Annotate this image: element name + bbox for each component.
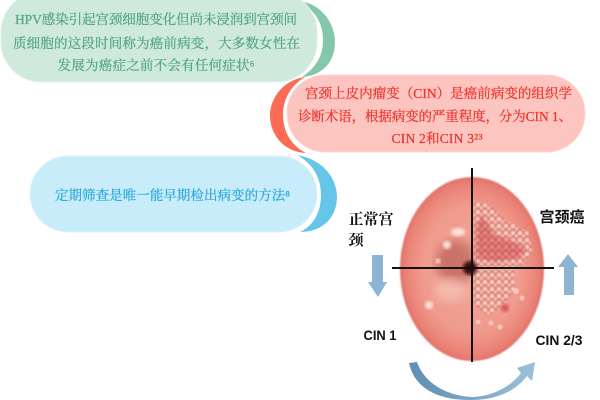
red text: CIN 2和CIN 3²³ xyxy=(392,131,482,146)
cervix illustration xyxy=(400,177,544,361)
chart: cervix diagram xyxy=(348,168,585,400)
green text: 质细胞的这段时间称为癌前病变，大多数女性在 xyxy=(13,35,300,52)
blue crescent xyxy=(297,155,337,232)
panel: blue screening note xyxy=(30,155,337,232)
blue text: 定期筛查是唯一能早期检出病变的方法⁸ xyxy=(55,187,290,203)
green text xyxy=(13,11,300,73)
green pill xyxy=(1,0,317,82)
arrow: curved progression xyxy=(409,362,535,400)
label: normal cervix xyxy=(348,210,394,249)
green text: HPV感染引起宫颈细胞变化但尚未浸润到宫颈间 xyxy=(15,11,297,27)
blue pill xyxy=(30,156,317,232)
label: CIN 1: CIN 1 xyxy=(364,327,397,343)
label: normal cervix: 颈 xyxy=(348,232,364,249)
label: CIN 2/3: CIN 2/3 xyxy=(536,332,583,348)
label: cervical cancer: 宫颈癌 xyxy=(539,208,585,226)
crosshair lines xyxy=(392,168,554,362)
red pill xyxy=(287,75,585,152)
red text xyxy=(298,85,572,146)
arrow: down xyxy=(368,255,387,297)
red text: 宫颈上皮内瘤变（CIN）是癌前病变的组织学 xyxy=(305,85,572,101)
red text: 诊断术语，根据病变的严重程度，分为CIN 1、 xyxy=(298,108,572,125)
green text: 发展为癌症之前不会有任何症状⁶ xyxy=(58,57,255,73)
label: normal cervix: 正常宫 xyxy=(348,210,394,228)
panel: green HPV note xyxy=(1,0,335,82)
red crescent xyxy=(270,77,306,153)
green crescent xyxy=(298,1,335,77)
panel: red CIN note xyxy=(270,75,585,153)
arrow: up xyxy=(558,254,578,295)
